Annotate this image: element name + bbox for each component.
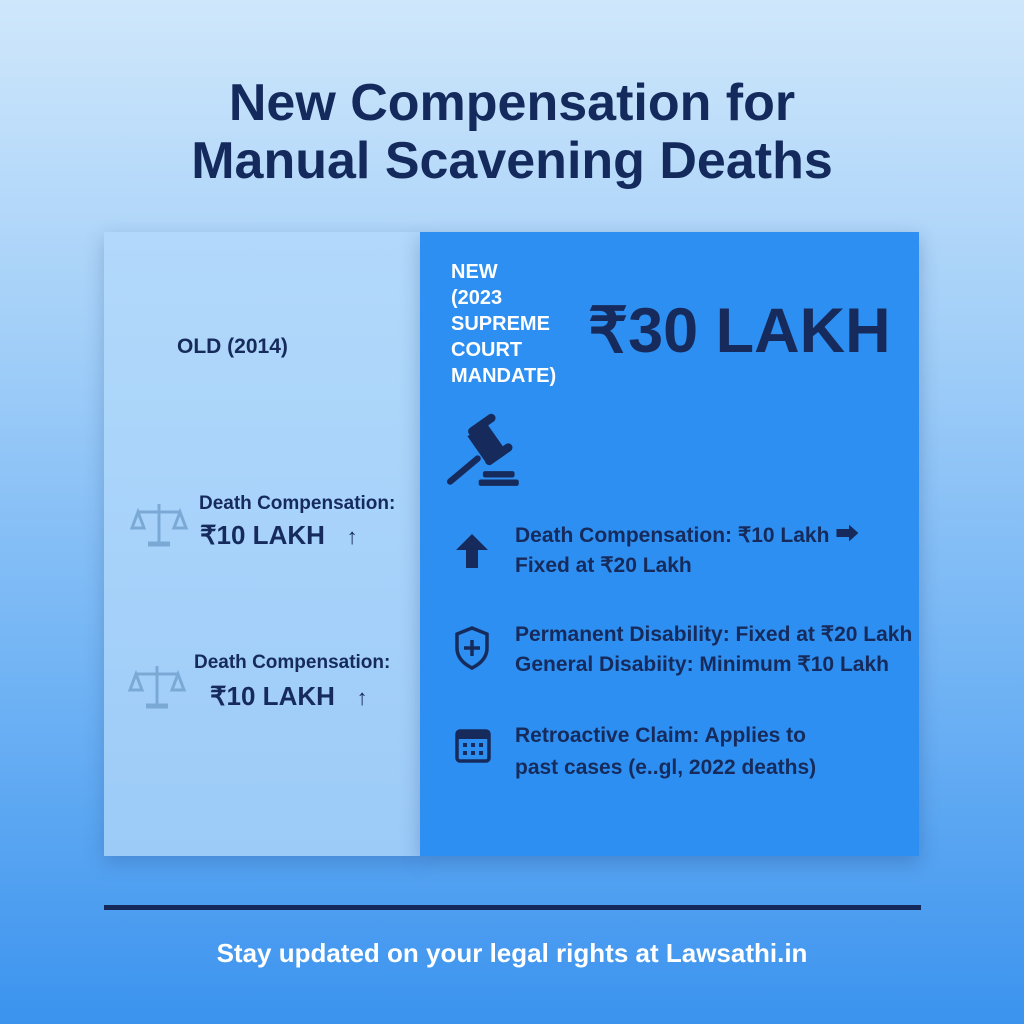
heading: new: COURT (451, 339, 522, 361)
icon: shield (455, 626, 489, 670)
footer: Stay updated on your legal rights at Lawsathi.in (217, 938, 807, 968)
item: retroactive: Retroactive Claim: Applies to (515, 724, 806, 747)
icon: gavel (447, 414, 519, 486)
item: old death compensation 2: ₹10 LAKH ↑ (210, 681, 368, 711)
title: New Compensation for (229, 74, 795, 132)
item: disability (455, 623, 912, 676)
panel: old (104, 232, 420, 856)
heading: new: NEW (451, 261, 498, 283)
big amount: ₹30 LAKH (588, 296, 891, 366)
item: disability: General Disabiity: Minimum ₹10 Lakh (515, 653, 889, 676)
item: old death compensation 2 (128, 652, 390, 711)
item: disability: Permanent Disability: Fixed at ₹20 Lakh (515, 623, 912, 646)
icon: scales (128, 666, 186, 708)
item: old death compensation 2: Death Compensation: (194, 652, 390, 673)
heading: new (451, 261, 556, 387)
item: old death compensation 1 (130, 493, 395, 550)
icon: scales (130, 504, 188, 546)
heading: old: OLD (2014) (177, 335, 288, 358)
divider line (104, 905, 921, 910)
heading: new: SUPREME (451, 313, 550, 335)
item: retroactive: past cases (e..gl, 2022 deaths) (515, 756, 816, 779)
title: Manual Scavening Deaths (191, 132, 833, 190)
item: old death compensation 1: ₹10 LAKH ↑ (200, 520, 358, 550)
item: old death compensation 1: Death Compensation: (199, 493, 395, 514)
item: death compensation: Death Compensation: ₹10 Lakh ➡ (515, 521, 859, 548)
icon: calendar (455, 729, 491, 763)
item: death compensation (456, 521, 859, 577)
icon: up arrow (456, 534, 488, 568)
item: retroactive (455, 724, 816, 779)
heading: new: (2023 (451, 287, 502, 309)
panel: new (420, 232, 919, 856)
item: death compensation: Fixed at ₹20 Lakh (515, 554, 692, 577)
title (191, 74, 833, 190)
heading: new: MANDATE) (451, 365, 556, 387)
